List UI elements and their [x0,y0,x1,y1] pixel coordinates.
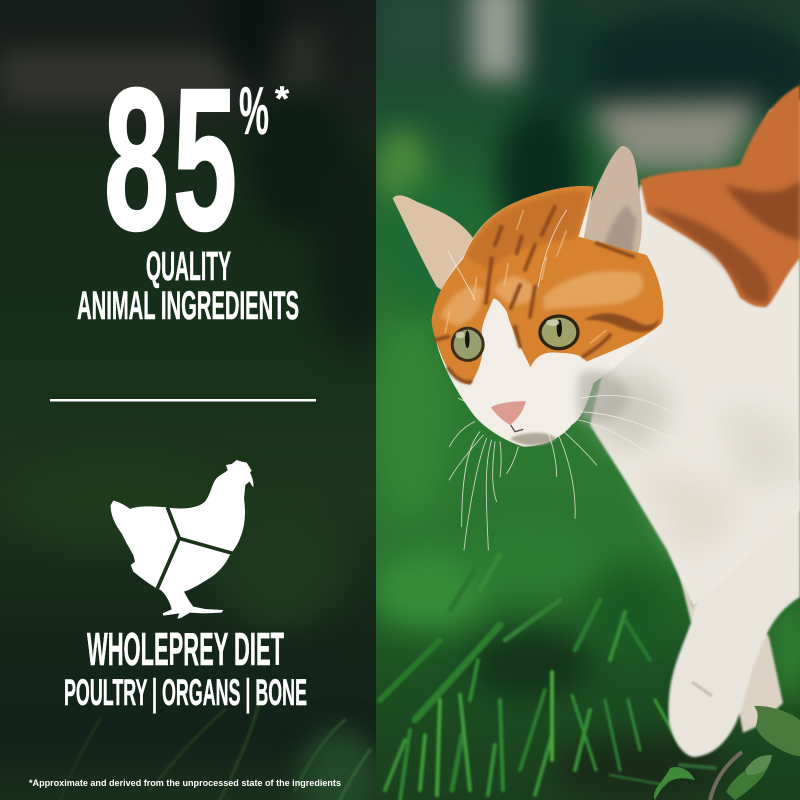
heading: quality animal ingredients: QUALITY [146,243,231,289]
orange head fur [432,186,663,385]
footnote: *Approximate and derived from the unprocessed state of the ingredients [29,778,341,789]
eye left [451,327,485,362]
grey cheek shadow [577,371,630,422]
eye right [538,314,580,350]
headline stat: 85%*: * [275,80,290,118]
headline stat: 85%*: % [239,73,269,149]
forehead shade [467,191,588,270]
fur flecks [445,210,607,343]
cat head [393,146,690,550]
headline stat: 85%*: 8 [104,46,169,272]
whiskers [448,210,690,550]
brow marking [584,313,659,332]
mouth [511,425,523,432]
white divider [50,399,316,402]
headline stat: 85%*: 5 [173,46,237,272]
forehead dark stripes [435,207,633,382]
orange back patch [640,85,800,307]
panel: dark left background [0,0,395,800]
nose [491,401,526,425]
body shading [590,375,800,553]
ear right [584,146,642,253]
back patch dark markings [652,180,800,303]
ear right inner [603,205,637,253]
leaves [654,706,800,800]
paw marks [692,682,712,696]
icon: chicken [111,460,253,618]
headline stat: 85%* [104,46,290,272]
grass blades [380,555,720,800]
heading: quality animal ingredients [77,243,299,328]
forehead lighter fur [440,271,643,327]
chin shadow [510,433,557,445]
text: POULTRY | ORGANS | BONE [64,672,307,714]
face base [432,186,634,447]
cat body [590,100,800,607]
heading: quality animal ingredients: ANIMAL INGREDIENTS [77,284,299,328]
text: WHOLEPREY DIET [87,623,284,675]
cat legs [669,480,800,757]
cat [393,85,800,800]
ear left [393,195,477,293]
photo background: grass and garden [370,0,800,800]
